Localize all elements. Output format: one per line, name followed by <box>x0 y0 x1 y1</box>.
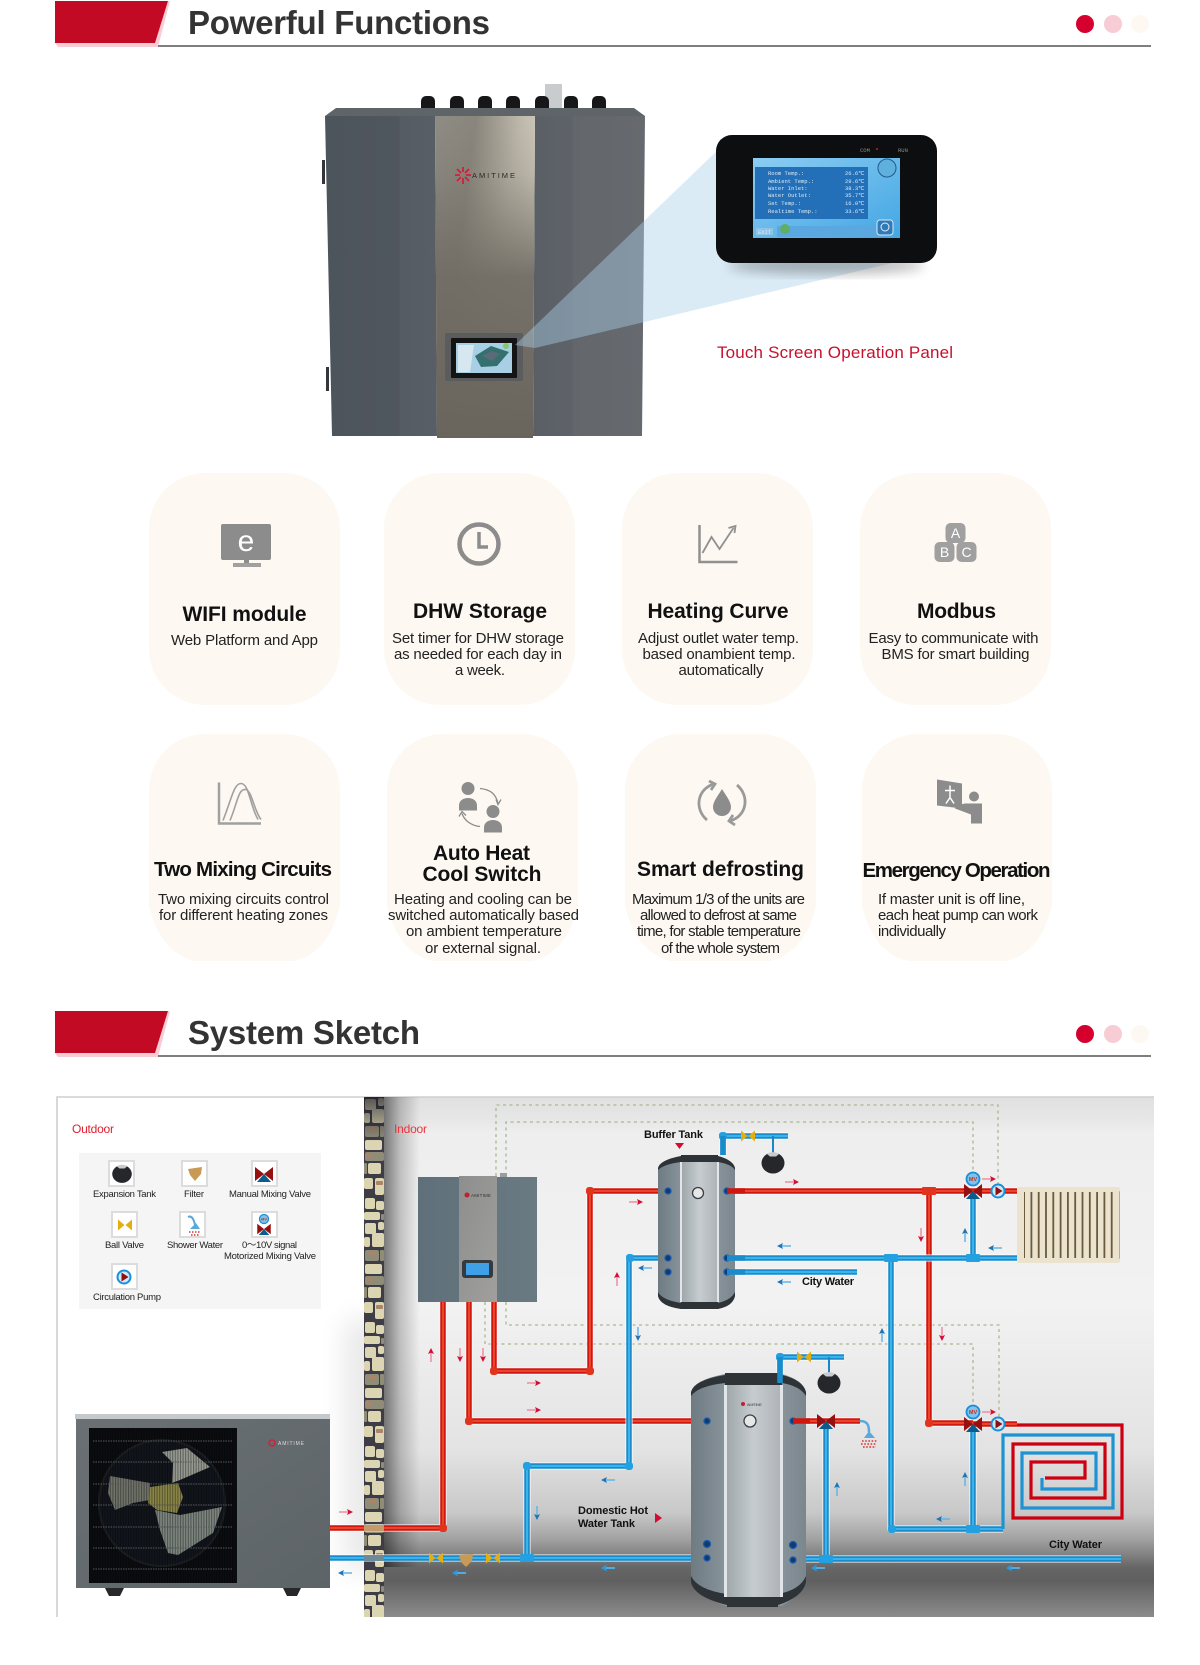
icon: monitor with e: e <box>238 525 254 558</box>
circulation pumps <box>992 1184 1004 1430</box>
expansion tanks <box>762 1136 840 1394</box>
water pipes: cold <box>330 1136 1121 1559</box>
feature card: WIFI module <box>149 473 340 705</box>
pipe elbows and tees: hot <box>439 1187 936 1532</box>
description <box>868 630 1038 663</box>
title: WIFI module <box>182 603 306 626</box>
unit logo <box>269 1440 305 1447</box>
label: city water lower: City Water <box>1049 1539 1103 1551</box>
data table: 38.3℃ <box>845 185 865 192</box>
title: Cool Switch <box>422 863 542 886</box>
tank body <box>691 1374 806 1606</box>
feature card: Emergency Operation <box>862 734 1052 961</box>
icon: clock <box>460 524 498 564</box>
description: Heating and cooling can be <box>394 891 572 908</box>
data table: 16.0℃ <box>845 200 865 207</box>
legend: circulation pump: Circulation Pump <box>93 1292 161 1303</box>
icon: two curves <box>219 782 261 824</box>
tank logo: AMITIME <box>747 1402 762 1407</box>
description: BMS for smart building <box>882 646 1030 663</box>
display <box>462 1260 493 1278</box>
icon: ABC blocks <box>934 523 976 562</box>
title <box>422 842 542 886</box>
water pipes: hot <box>330 1191 1017 1528</box>
fan <box>89 1428 237 1583</box>
ball valves <box>429 1130 811 1564</box>
stone wall <box>364 1097 420 1617</box>
title: Auto Heat <box>433 842 530 865</box>
data table: Set Temp.: <box>768 200 801 207</box>
description: as needed for each day in <box>394 646 562 663</box>
data table: 26.6℃ <box>845 170 865 177</box>
description: or external signal. <box>425 940 541 957</box>
mixing valves <box>817 1184 982 1432</box>
description <box>158 891 329 924</box>
control panel bezel <box>445 333 523 381</box>
projection beam to panel <box>515 147 892 348</box>
label: domestic hot water tank: Domestic Hot <box>578 1505 648 1517</box>
description: of the whole system <box>661 940 780 957</box>
legend: shower water <box>167 1212 223 1251</box>
description <box>632 891 805 957</box>
legend: ball valve <box>105 1212 144 1251</box>
section header: Powerful Functions <box>55 1 1151 47</box>
feature card: Auto Heat Cool Switch <box>387 734 579 961</box>
pipe wall crossings <box>364 1525 384 1561</box>
description: on ambient temperature <box>406 923 562 940</box>
description: Maximum 1/3 of the units are <box>632 891 805 908</box>
label: domestic hot water tank: Water Tank <box>578 1518 636 1530</box>
screen buttons <box>756 159 896 237</box>
ports <box>704 1418 796 1563</box>
status leds: COM <box>860 147 870 154</box>
legend: motorized mixing valve: Motorized Mixing Valve <box>224 1251 316 1262</box>
top connector <box>500 1173 507 1178</box>
cable glands <box>421 96 606 116</box>
three dots <box>1076 1025 1149 1043</box>
tank body <box>658 1156 735 1309</box>
legend: filter: Filter <box>184 1189 204 1200</box>
flow arrows <box>338 1176 1020 1576</box>
three dots <box>1076 15 1149 33</box>
data table: Room Temp.: <box>768 170 804 177</box>
cabinet sides <box>418 1177 537 1302</box>
red header tab <box>55 1 170 47</box>
icon: swapping people <box>459 782 502 832</box>
motorized valve heads <box>966 1172 980 1418</box>
data table: Water Outlet: <box>768 192 811 199</box>
indoor wall background <box>384 1097 1154 1617</box>
description: switched automatically based <box>388 907 579 924</box>
display <box>753 158 900 238</box>
legend: expansion tank: Expansion Tank <box>93 1189 156 1200</box>
side panels <box>322 116 645 436</box>
heading: Powerful Functions <box>188 4 490 41</box>
enlarged touch screen panel <box>716 135 937 274</box>
description <box>638 630 799 679</box>
label: city water upper: City Water <box>802 1276 855 1288</box>
outdoor shading <box>340 1318 364 1572</box>
unit logo: AMITIME <box>471 1193 491 1198</box>
radiator <box>1017 1187 1120 1263</box>
heading: System Sketch <box>188 1014 420 1051</box>
feature card: Smart defrosting <box>625 734 816 961</box>
label: buffer tank: Buffer Tank <box>644 1129 704 1141</box>
panel border <box>57 1097 1154 1617</box>
panel caption: Touch Screen Operation Panel <box>717 343 953 362</box>
centre panel edge <box>724 1385 783 1597</box>
icon: person at board <box>937 780 982 824</box>
legend: manual mixing valve <box>229 1161 311 1200</box>
icon: ABC blocks: C <box>961 544 972 560</box>
icon: monitor with e <box>221 524 271 567</box>
description <box>878 891 1038 940</box>
unit logo: AMITIME <box>278 1441 305 1447</box>
data table: 35.7℃ <box>845 192 865 199</box>
data table <box>755 167 868 219</box>
description: each heat pump can work <box>878 907 1038 924</box>
outdoor label: Outdoor <box>72 1122 114 1136</box>
gauge <box>692 1188 704 1198</box>
legend: motorized mixing valve: 0～10V signal <box>242 1240 297 1251</box>
legend: expansion tank <box>93 1161 156 1200</box>
unit feet <box>105 1588 301 1596</box>
buffer tank <box>658 1155 735 1309</box>
screen buttons: EXIT <box>758 229 772 236</box>
description: Set timer for DHW storage <box>392 630 564 647</box>
wall-mounted indoor unit product image <box>322 84 645 438</box>
legend: motorized mixing valve <box>224 1212 316 1262</box>
shower head <box>860 1421 877 1447</box>
status leds: RUN <box>898 147 908 154</box>
steel front panel <box>435 116 535 438</box>
legend: ball valve: Ball Valve <box>105 1240 144 1251</box>
ports <box>665 1188 730 1275</box>
exhaust pipe <box>545 84 562 114</box>
data table: 29.6℃ <box>845 178 865 185</box>
label: domestic hot water tank <box>578 1505 662 1530</box>
description: Web Platform and App <box>171 632 318 649</box>
description <box>392 630 564 679</box>
description: Easy to communicate with <box>868 630 1038 647</box>
legend: filter <box>182 1161 207 1200</box>
feature card: Heating Curve <box>622 473 813 705</box>
indoor label: Indoor <box>394 1122 427 1136</box>
top of cabinet <box>325 108 645 116</box>
data table: Ambient Temp.: <box>768 178 814 185</box>
red header tab <box>55 1011 170 1057</box>
centre panel <box>727 1385 780 1597</box>
title: Emergency Operation <box>862 859 1050 882</box>
centre panel <box>459 1176 497 1302</box>
feature card: Modbus <box>860 473 1051 705</box>
panel shadow <box>728 256 924 274</box>
legend: circulation pump <box>93 1264 161 1303</box>
title: Modbus <box>917 600 996 623</box>
tank top and base bands <box>658 1155 735 1309</box>
icon: rising chart <box>700 525 738 562</box>
description <box>388 891 579 957</box>
icon: ABC blocks: A <box>951 525 961 541</box>
data table: Realtime Temp.: <box>768 208 818 215</box>
description: individually <box>878 923 946 940</box>
tank bands <box>691 1373 806 1607</box>
description: Adjust outlet water temp. <box>638 630 799 647</box>
description: based onambient temp. <box>642 646 796 663</box>
data table: 33.6℃ <box>845 208 865 215</box>
title: Heating Curve <box>648 600 788 623</box>
legend: manual mixing valve: Manual Mixing Valve <box>229 1189 311 1200</box>
centre panel <box>680 1162 719 1302</box>
description: automatically <box>678 662 764 679</box>
grille wires <box>93 1441 233 1569</box>
title: Two Mixing Circuits <box>154 858 332 881</box>
top cap <box>75 1414 330 1419</box>
legend: shower water: Shower Water <box>167 1240 223 1251</box>
unit body <box>76 1418 330 1588</box>
description: Two mixing circuits control <box>158 891 329 908</box>
title: Smart defrosting <box>637 858 804 881</box>
description: time, for stable temperature <box>637 923 801 940</box>
description: allowed to defrost at same <box>640 907 797 924</box>
feature card: Two Mixing Circuits <box>149 734 340 961</box>
data table: Water Inlet: <box>768 185 808 192</box>
control signal lines <box>485 1105 999 1418</box>
brand logo <box>455 167 515 184</box>
section header: System Sketch <box>55 1011 1151 1057</box>
description: a week. <box>455 662 505 679</box>
underfloor heating coil <box>1003 1425 1122 1529</box>
fan grille <box>89 1428 237 1583</box>
brand logo: AMITIME <box>472 171 515 180</box>
title: DHW Storage <box>413 600 547 623</box>
feature card: DHW Storage <box>384 473 575 705</box>
pipe re-entry into tanks <box>723 1136 810 1421</box>
black bezel <box>716 135 937 263</box>
label: buffer tank <box>644 1129 704 1149</box>
icon: water drop cycle <box>699 781 745 825</box>
indoor wall unit <box>418 1173 537 1302</box>
icon: ABC blocks: B <box>940 544 949 560</box>
domestic hot water tank <box>691 1373 806 1607</box>
description: If master unit is off line, <box>878 891 1025 908</box>
legend <box>79 1153 321 1309</box>
centre panel face <box>682 1162 717 1302</box>
strainer filter <box>459 1554 473 1567</box>
outdoor heat pump <box>75 1414 330 1596</box>
status leds <box>860 147 908 154</box>
gauge <box>744 1415 756 1427</box>
description: for different heating zones <box>159 907 328 924</box>
system schematic diagram <box>57 1097 1154 1617</box>
pipe elbows and tees: cold <box>520 1132 980 1563</box>
